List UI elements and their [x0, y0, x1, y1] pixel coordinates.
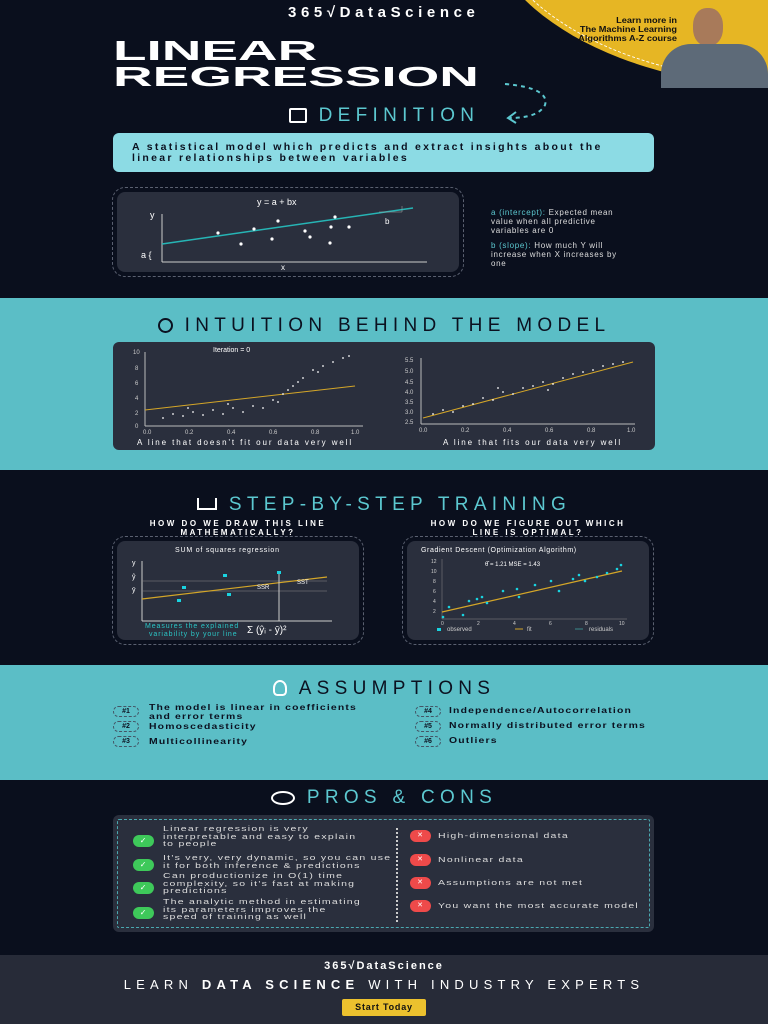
panel: pros and cons: ✓ [140, 860, 147, 869]
panel: two charts: 4 [135, 396, 139, 402]
panel: pros and cons [113, 815, 654, 932]
assumptions list: Multicollinearity [149, 737, 248, 746]
panel: pros and cons: The analytic method in estimating its parameters improves the speed of training as well [163, 897, 361, 921]
assumptions list [113, 703, 646, 747]
panel: two charts: 0.2 [185, 430, 194, 436]
panel: two charts: 0.0 [143, 430, 152, 436]
panel: two charts: 1.0 [351, 430, 360, 436]
panel: two charts: 0.6 [269, 430, 278, 436]
panel: pros and cons: You want the most accurate model [438, 901, 639, 910]
panel: gradient descent: 2 [477, 621, 480, 627]
panel: gradient descent: 8 [585, 621, 588, 627]
text: intercept and slope: a (intercept): Expected mean value when all predictive variables are 0 b (slope): How much Y will increase when X increases by one [491, 208, 617, 268]
panel: gradient descent [407, 541, 649, 640]
footer logo: 365√DataScience [324, 960, 444, 972]
teal band: assumptions [0, 665, 768, 780]
panel: gradient descent: 8 [433, 579, 436, 585]
panel: two charts: 0.8 [587, 428, 596, 434]
subheadings: HOW DO WE DRAW THIS LINE [150, 519, 326, 528]
assumptions list: Outliers [449, 736, 498, 745]
panel: gradient descent: θ̂ = 1.21 MSE = 1.43 [485, 562, 541, 568]
panel: pros and cons: High-dimensional data [438, 831, 569, 840]
panel: two charts: Iteration = 0 [213, 347, 250, 354]
panel: pros and cons: Assumptions are not met [438, 878, 583, 887]
panel: sum of squares: y [132, 560, 136, 567]
panel: two charts: 2.5 [405, 420, 414, 426]
panel: pros and cons: ✕ [417, 832, 424, 839]
panel: gradient descent: 10 [431, 569, 437, 575]
pros list [133, 824, 391, 921]
panel: gradient descent: 12 [431, 559, 437, 565]
panel: two charts: 0.2 [461, 428, 470, 434]
button: start today: Start Today [355, 1002, 413, 1012]
teal band: intuition [0, 298, 768, 470]
arrow: dashed to definition [504, 83, 546, 124]
panel: two charts [113, 342, 655, 450]
text: HOW DO WE FIGURE OUT WHICH [431, 519, 625, 528]
chart: linear equation [117, 192, 459, 272]
footer [0, 955, 768, 1024]
panel: two charts: A line that fits our data very well [443, 438, 622, 447]
panel: gradient descent: 4 [513, 621, 516, 627]
title: LINEAR [113, 35, 317, 66]
panel: two charts: 4.5 [405, 380, 414, 386]
panel: pros and cons: ✓ [140, 908, 147, 917]
panel: two charts: 2 [135, 411, 139, 417]
assumptions list: #1 [122, 708, 130, 715]
assumptions list: #6 [424, 738, 432, 745]
panel: sum of squares: SSR [257, 585, 270, 591]
panel: two charts: 0.4 [503, 428, 512, 434]
assumptions list: Homoscedasticity [149, 722, 257, 731]
panel: gradient descent: 10 [619, 621, 625, 627]
panel: two charts: 0.8 [311, 430, 320, 436]
panel: gradient descent: 0 [441, 621, 444, 627]
course callout text: The Machine Learning [580, 25, 677, 34]
panel: pros and cons: Can productionize in O(1) time complexity, so it's fast at making predictions [163, 871, 355, 895]
panel: pros and cons: ✕ [417, 856, 424, 863]
assumptions list: and error terms [149, 712, 243, 721]
panel: two charts: 1.0 [627, 428, 636, 434]
heading: step-by-step: STEP-BY-STEP TRAINING [229, 494, 571, 515]
panel: sum of squares: ŷ [132, 574, 136, 581]
heading: intuition: INTUITION BEHIND THE MODEL [185, 315, 610, 336]
panel: two charts: 10 [133, 350, 140, 356]
cons list [410, 830, 639, 912]
subheadings [150, 519, 326, 537]
chart: linear equation: y [150, 210, 155, 220]
panel: gradient descent: 6 [549, 621, 552, 627]
chart: linear equation: y = a + bx [257, 197, 297, 207]
instructor photo placeholder [661, 8, 768, 88]
panel: pros and cons: Nonlinear data [438, 855, 524, 864]
panel: two charts: 3.0 [405, 410, 414, 416]
panel: pros and cons: ✓ [140, 836, 147, 845]
panel: two charts: 5.0 [405, 369, 414, 375]
panel: two charts: 0 [135, 424, 139, 430]
panel: pros and cons: Linear regression is very interpretable and easy to explain to people [163, 824, 356, 848]
panel: gradient descent: Gradient Descent (Optimization Algorithm) [421, 547, 577, 554]
chart: linear equation: b [385, 217, 390, 226]
panel: sum of squares [117, 541, 359, 640]
panel: sum of squares: variability by your line [149, 631, 238, 638]
definition box: A statistical model which predicts and extract insights about the linear relationships between variables [132, 141, 603, 164]
panel: sum of squares: SUM of squares regression [175, 547, 280, 554]
panel: two charts: 3.5 [405, 400, 414, 406]
footer tagline: LEARN DATA SCIENCE WITH INDUSTRY EXPERTS [124, 977, 644, 992]
yellow corner circle [482, 0, 768, 88]
assumptions list: Independence/Autocorrelation [449, 706, 632, 715]
panel: gradient descent: 6 [433, 589, 436, 595]
assumptions list: #5 [424, 723, 432, 730]
panel: pros and cons: ✓ [140, 883, 147, 892]
heading: definition: DEFINITION [319, 105, 479, 126]
definition box [113, 133, 654, 172]
panel: two charts: A line that doesn't fit our data very well [137, 438, 353, 447]
panel: gradient descent: fit [527, 627, 532, 633]
title [113, 35, 479, 92]
course callout text: Learn more in [616, 16, 677, 25]
button: start today [342, 999, 426, 1016]
assumptions list: Normally distributed error terms [449, 721, 646, 730]
panel: two charts: 5.5 [405, 358, 414, 364]
panel: gradient descent: observed [447, 627, 472, 633]
subheadings: MATHEMATICALLY? [180, 528, 296, 537]
panel: gradient descent: 2 [433, 609, 436, 615]
course callout text: Algorithms A-Z course [578, 34, 677, 43]
assumptions list: #2 [122, 723, 130, 730]
panel: pros and cons: ✕ [417, 902, 424, 909]
logo: 365√DataScience [288, 4, 479, 21]
chart: linear equation: x [281, 263, 285, 272]
course callout text [578, 16, 677, 43]
panel: pros and cons: It's very, very dynamic, so you can use it for both inference & predictions [163, 853, 391, 870]
text: LINE IS OPTIMAL? [472, 528, 584, 537]
title: REGRESSION [113, 61, 479, 92]
assumptions list: #3 [122, 738, 130, 745]
chart: linear equation: a { [141, 250, 152, 260]
assumptions list: The model is linear in coefficients [149, 703, 357, 712]
panel: two charts: 6 [135, 381, 139, 387]
panel: sum of squares: ȳ [132, 587, 136, 594]
heading: pros & cons: PROS & CONS [307, 787, 497, 808]
panel: sum of squares: Σ (ŷᵢ - ȳ)² [247, 625, 287, 636]
panel: sum of squares: SST [297, 580, 309, 586]
panel: sum of squares: Measures the explained [145, 623, 239, 630]
panel: two charts: 0.0 [419, 428, 428, 434]
assumptions list: #4 [424, 708, 432, 715]
heading: assumptions: ASSUMPTIONS [299, 678, 495, 699]
panel: two charts: 0.4 [227, 430, 236, 436]
panel: gradient descent: 4 [433, 599, 436, 605]
panel: gradient descent: residuals [589, 627, 613, 633]
panel: pros and cons: ✕ [417, 879, 424, 886]
panel: two charts: 4.0 [405, 390, 414, 396]
panel: two charts: 8 [135, 366, 139, 372]
panel: two charts: 0.6 [545, 428, 554, 434]
